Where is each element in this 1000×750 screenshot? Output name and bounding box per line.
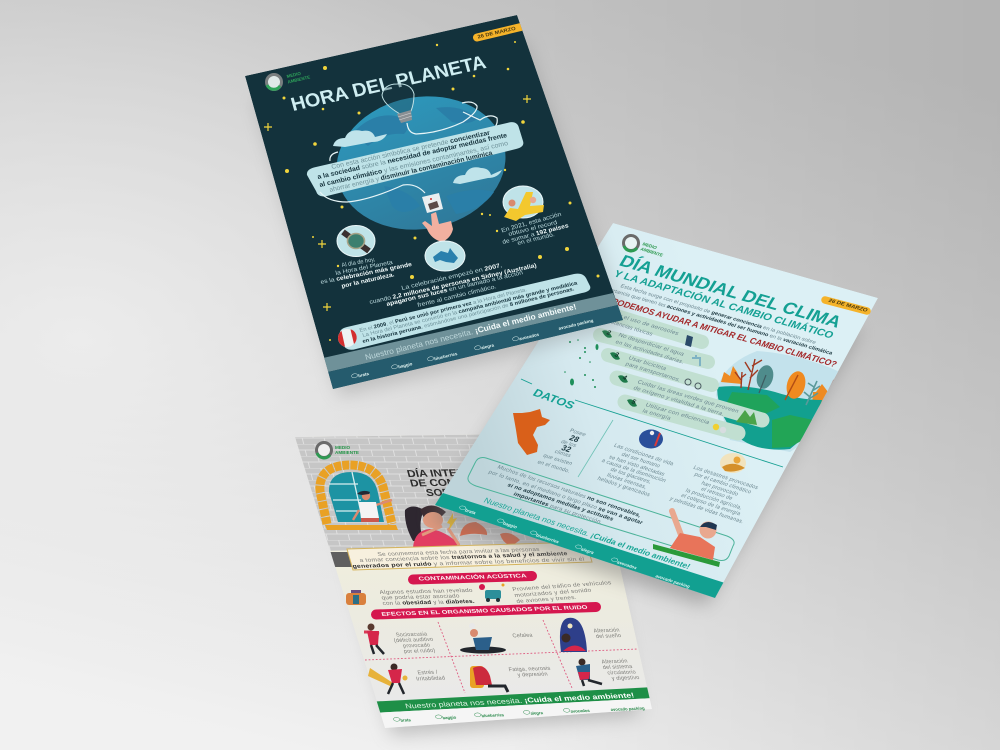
text: disasters: por el cambio climático bbox=[693, 472, 752, 495]
text: living conditions: del ser humano bbox=[620, 452, 661, 469]
stat: 28 of 32 climates: en el mundo. bbox=[536, 460, 571, 475]
text: traffic noise source: de aviones y trenes. bbox=[516, 595, 578, 605]
poster 3: noise day bbox=[295, 433, 655, 735]
date tag bbox=[477, 26, 525, 38]
text: disasters: han provocado bbox=[700, 481, 739, 498]
heading: contaminación acústica: CONTAMINACIÓN ACÚSTICA bbox=[417, 571, 528, 582]
sponsor logos: poster 2: ⬭avocados bbox=[609, 555, 640, 571]
effect: socioacusia bbox=[364, 624, 436, 655]
tip 5: energy: 5 bbox=[630, 399, 637, 406]
sponsor logos: poster 3: ⬭baggio bbox=[434, 712, 458, 721]
text: living conditions bbox=[596, 443, 675, 498]
tip 5: energy bbox=[627, 399, 726, 433]
illustration: window with woman bbox=[320, 465, 398, 530]
illustration: woman covering ears bbox=[405, 505, 520, 548]
sponsor logos: poster 3: ⬭avocados bbox=[562, 705, 591, 715]
map: Peru bbox=[513, 409, 550, 455]
sponsor logos: poster 1: ⬭baggio bbox=[390, 358, 414, 372]
tip 2: water: No desperdiciar el agua bbox=[617, 333, 686, 358]
effect: alteración circulatoria: y digestivo bbox=[611, 675, 640, 682]
effect: alteración del sueño: del sueño bbox=[595, 633, 622, 640]
illustration: globe bbox=[326, 83, 516, 243]
text: living conditions: a causa de la disminución bbox=[600, 458, 667, 484]
text: largest celebration: es la celebración más grande bbox=[320, 262, 413, 286]
stars bbox=[264, 41, 600, 341]
stat: 28 of 32 climates: climas bbox=[553, 449, 572, 459]
panel: noise day introduction bbox=[347, 542, 592, 570]
tip 5: energy: Utilizar con eficiencia bbox=[644, 403, 711, 426]
panel: main message: al cambio climático y las emisiones contaminantes, así como bbox=[319, 140, 509, 189]
text: 2007 origin: apagaron sus luces en un llamado a la acción bbox=[386, 270, 524, 308]
effect: estrés / irritabilidad: Irritabilidad bbox=[415, 676, 446, 682]
text: disasters: el colapso de la energía bbox=[680, 493, 742, 517]
effect: cefalea: Cefalea bbox=[512, 633, 534, 639]
effect: estrés / irritabilidad: Estrés / bbox=[417, 670, 439, 676]
effect: alteración circulatoria: Alteración bbox=[601, 659, 629, 665]
illustration: watch circle bbox=[337, 226, 375, 256]
illustration: australia circle bbox=[425, 241, 465, 271]
heading: datos with rule bbox=[521, 379, 783, 467]
stat: 28 of 32 climates: 32 bbox=[560, 444, 573, 454]
footer slogan: poster 2: Nuestro planeta nos necesita. ¡Cuida el medio ambiente! bbox=[482, 496, 692, 571]
text: 2021 record bbox=[501, 212, 570, 247]
footer band bbox=[430, 493, 725, 600]
effect: fatiga, neurosis y depresión bbox=[470, 666, 551, 692]
poster 3 drop shadow bbox=[330, 450, 640, 735]
text: 2021 record: En 2021, esta acción bbox=[501, 212, 562, 234]
icon: climate conditions bbox=[639, 430, 663, 448]
tip 2: water: 2 bbox=[605, 330, 612, 337]
poster 1: earth hour bbox=[245, 15, 630, 396]
panel: Peru participation: En el 2009, el Perú se unió por primera vez a la Hora del Planeta. bbox=[359, 287, 528, 334]
stat: 28 of 32 climates: Posee bbox=[568, 428, 587, 438]
text: living conditions: Las condiciones de vida bbox=[612, 443, 675, 468]
text: largest celebration: la Hora del Planeta bbox=[335, 260, 394, 277]
illustration: light bulb with wire bbox=[382, 84, 497, 134]
sponsor logos: poster 2: ⬭baggio bbox=[495, 516, 520, 530]
text: obesity and diabetes: que podría estar asociado bbox=[381, 594, 461, 601]
heading: how can we help: ¿CÓMO PODEMOS AYUDAR A MITIGAR EL CAMBIO CLIMÁTICO? bbox=[577, 286, 839, 369]
text: disasters bbox=[668, 465, 759, 525]
effect: alteración del sueño: Alteración bbox=[593, 628, 621, 634]
illustration: switch and hand bbox=[422, 193, 453, 242]
text: 2021 record: de sumar a 192 países bbox=[502, 223, 570, 246]
tip 4: green areas: de oxígeno y vitalidad a la tierra. bbox=[632, 386, 726, 418]
tip 3: bicycle: Usar bicicleta bbox=[627, 356, 668, 372]
stat: 28 of 32 climates: de los bbox=[559, 439, 578, 449]
text: obesity and diabetes bbox=[379, 588, 476, 607]
panel: noise day introduction: a tomar conciencia sobre los trastornos a la salud y el ambiente bbox=[359, 551, 568, 564]
logo: medio ambiente: MEDIO bbox=[335, 445, 350, 450]
effect: alteración circulatoria bbox=[576, 658, 640, 686]
text: traffic noise source: Proviene del tráfico de vehículos bbox=[512, 580, 612, 593]
date tag: 26 DE MARZO bbox=[827, 298, 869, 314]
tip 4: green areas: 4 bbox=[621, 375, 628, 382]
text: traffic noise source: motorizados y del sonido bbox=[514, 588, 592, 599]
sponsor logos: poster 3: ⬭alegra bbox=[522, 707, 544, 717]
text: 2007 origin: La celebración empezó en 2007, bbox=[401, 263, 503, 292]
tip 3: bicycle bbox=[610, 352, 701, 389]
logo: medio ambiente bbox=[316, 442, 359, 458]
text: largest celebration bbox=[320, 257, 413, 290]
tip 3: bicycle: 3 bbox=[613, 352, 620, 359]
heading: effects on the body: EFECTOS EN EL ORGANISMO CAUSADOS POR EL RUIDO bbox=[381, 605, 589, 618]
poster 3 sheet bbox=[295, 433, 655, 730]
panel: Peru participation: en la historia peruana , estimándose una participación de 8 millones de personas. bbox=[362, 286, 576, 345]
falling green leaves bbox=[564, 339, 598, 388]
sponsor logos: poster 1: avocado packing bbox=[558, 318, 594, 331]
effect: alteración del sueño bbox=[560, 618, 622, 652]
effect: fatiga, neurosis y depresión: y depresión bbox=[517, 672, 549, 678]
effect: fatiga, neurosis y depresión: Fatiga, neurosis bbox=[508, 666, 551, 673]
stat: 28 of 32 climates: que existen bbox=[542, 453, 573, 467]
sponsor logos: poster 2: ⬭brata bbox=[457, 503, 479, 516]
illustration: man raising hand bbox=[653, 511, 720, 567]
sponsor logos: poster 1: ⬭avocados bbox=[511, 329, 540, 344]
text: 2007 origin: frente al cambio climático. bbox=[417, 284, 498, 309]
text: climate day introduction: Esta fecha surge con el propósito de generar conciencia en la población sobre bbox=[619, 284, 817, 346]
panel: noise day introduction: Se conmemora esta fecha para invitar a las personas bbox=[377, 547, 541, 558]
logo: medio ambiente: MEDIO bbox=[286, 71, 302, 79]
logo: medio ambiente: AMBIENTE bbox=[335, 450, 359, 455]
pills: five tips bbox=[590, 308, 762, 433]
sponsor logos: poster 1: ⬭blueberries bbox=[426, 348, 459, 364]
icon: drought sun bbox=[720, 453, 746, 473]
tip 4: green areas bbox=[618, 375, 757, 425]
sponsor logos: poster 2: avocado packing bbox=[654, 574, 691, 589]
tip 1: aerosols: Evitar el uso de aerosoles bbox=[604, 310, 680, 337]
text: living conditions: se han visto afectadas bbox=[607, 455, 666, 478]
sponsor logos: poster 2: ⬭alegra bbox=[573, 542, 597, 556]
sponsor logos: poster 3: ⬭blueberries bbox=[473, 709, 506, 719]
poster 1 sheet bbox=[245, 15, 630, 395]
text: largest celebration: por la naturaleza. bbox=[341, 272, 396, 290]
panel: Peru participation bbox=[340, 274, 590, 350]
poster 2: climate day bbox=[430, 223, 878, 606]
poster 2 sheet bbox=[430, 223, 878, 600]
poster 1 drop shadow bbox=[255, 40, 626, 396]
tip 5: energy: la energía bbox=[641, 409, 673, 422]
effect: socioacusia: (déficit auditivo bbox=[393, 637, 434, 644]
text: traffic noise source bbox=[512, 580, 612, 605]
effect: socioacusia: Socioacusia bbox=[395, 632, 429, 638]
text: 2007 origin: cuando 2,2 millones de personas en Sidney (Australia) bbox=[369, 263, 537, 306]
logo: medio ambiente bbox=[624, 236, 664, 258]
effect: alteración circulatoria: circulatorio bbox=[607, 670, 637, 676]
sponsor logos: poster 3: avocado packing bbox=[610, 706, 646, 712]
text: living conditions: lluvias intensas, bbox=[605, 473, 648, 491]
title: noise day: SOBRE EL RUIDO bbox=[425, 486, 524, 499]
footer slogan: poster 1: Nuestro planeta nos necesita. ¡Cuida el medio ambiente! bbox=[364, 302, 577, 362]
poster 1: earth hour: 26 DE MARZO bbox=[477, 26, 517, 40]
effect: socioacusia: por el ruido) bbox=[403, 648, 436, 655]
title: hora del planeta: HORA DEL PLANETA bbox=[289, 52, 489, 116]
text: obesity and diabetes: Algunos estudios han revelado bbox=[379, 588, 474, 596]
heading: contaminación acústica bbox=[413, 571, 532, 582]
tip 2: water bbox=[602, 330, 700, 366]
panel: Peru participation: La Hora del Planeta se convirtió en la campaña ambiental más grande y mediática bbox=[362, 280, 578, 339]
text: climate day introduction: la importancia que tienen las acciones y actividades del ser humano en la variación climática bbox=[594, 284, 834, 357]
callout: natural resources: si no adoptamos medidas y actitudes bbox=[506, 483, 615, 523]
sponsor logos: poster 1 bbox=[350, 318, 594, 381]
stat: 28 of 32 climates: 28 bbox=[568, 434, 581, 444]
sponsor logos: poster 1: ⬭alegra bbox=[473, 340, 495, 353]
text: disasters: y pérdidas de vidas humanas. bbox=[668, 496, 745, 525]
sponsor logos: poster 2 bbox=[457, 503, 691, 589]
tip 1: aerosols bbox=[599, 310, 693, 347]
text: disasters: el retraso de bbox=[699, 487, 734, 502]
illustration: landscape with trees and fire bbox=[716, 351, 840, 452]
sponsor logos: poster 2: ⬭blueberries bbox=[528, 528, 562, 545]
tip 3: bicycle: para transportarnos. bbox=[624, 362, 682, 383]
title: noise day: DÍA INTERNACIONAL bbox=[405, 465, 529, 480]
title: noise day: DE CONCIENCIACIÓN bbox=[408, 475, 534, 489]
text: obesity and diabetes: con la obesidad y la diabetes. bbox=[382, 599, 476, 607]
sponsor logos: poster 3: ⬭brata bbox=[392, 714, 412, 724]
tip 1: aerosols: y sustancias tóxicas bbox=[599, 317, 654, 338]
logo: medio ambiente: AMBIENTE bbox=[639, 247, 664, 258]
callout: natural resources: importantes para su protección. bbox=[512, 492, 604, 526]
panel: noise day introduction: generados por el ruido y a informar sobre los beneficios de vivir sin él bbox=[352, 557, 585, 570]
footer bands bbox=[323, 293, 618, 372]
stat: 28 of 32 climates bbox=[536, 428, 587, 475]
logo: medio ambiente: MEDIO bbox=[641, 242, 658, 250]
illustration: wire to switch bbox=[320, 152, 425, 202]
callout: natural resources: por lo tanto, en el mediano o largo plazo se van a agotar bbox=[487, 470, 645, 526]
tip 4: green areas: Cuidar las áreas verdes que proveen bbox=[636, 380, 740, 415]
illustration: clouds bbox=[333, 130, 502, 184]
panel: main message bbox=[307, 122, 523, 196]
text: living conditions: de los glaciares, bbox=[609, 467, 653, 485]
callout: natural resources: Muchos de los recursos naturales no son renovables, bbox=[496, 465, 642, 519]
heading: effects on the body bbox=[376, 605, 596, 618]
callout: natural resources bbox=[468, 458, 734, 560]
sponsor logos: poster 3 bbox=[392, 705, 646, 724]
panel: main message: ahorrar energía y disminuir la contaminación lumínica bbox=[329, 150, 494, 194]
logo: medio ambiente: AMBIENTE bbox=[287, 74, 311, 84]
title: climate day: Y LA ADAPTACIÓN AL CAMBIO CLIMÁTICO bbox=[611, 267, 837, 341]
text: disasters: la producción agrícola, bbox=[684, 488, 743, 511]
effect: cefalea bbox=[460, 623, 534, 654]
title: noise day bbox=[405, 465, 534, 499]
logo: medio ambiente bbox=[266, 71, 311, 90]
icon: scale with obesity bbox=[346, 590, 366, 605]
grid of dotted dividers bbox=[365, 620, 638, 693]
effect: socioacusia: provocado bbox=[402, 643, 431, 649]
illustration: people celebrating circle bbox=[503, 186, 544, 221]
text: 2021 record: obtuvo el record bbox=[508, 220, 558, 238]
panel: main message: a la sociedad sobre la necesidad de adoptar medidas frente bbox=[317, 132, 508, 181]
tip 2: water: en las actividades diarias. bbox=[614, 340, 685, 366]
divider bbox=[578, 420, 613, 477]
poster 2 drop shadow bbox=[430, 250, 860, 606]
icon: Peru flag bbox=[338, 329, 357, 347]
text: largest celebration: Al día de hoy, bbox=[341, 257, 376, 269]
effect: estrés / irritabilidad bbox=[368, 664, 446, 694]
text: living conditions: helados y granizados bbox=[596, 476, 651, 498]
heading: datos with rule: DATOS bbox=[530, 388, 577, 412]
text: disasters: Los desastres provocados bbox=[692, 465, 759, 491]
effect: alteración circulatoria: del sistema bbox=[602, 664, 634, 671]
text: 2021 record: en el mundo. bbox=[517, 232, 556, 247]
footer slogan: poster 3: Nuestro planeta nos necesita. ¡Cuida el medio ambiente! bbox=[404, 691, 635, 710]
panel: main message: Con esta acción simbólica se pretende concientizar bbox=[331, 130, 491, 171]
sponsor logos: poster 1: ⬭brata bbox=[350, 368, 370, 381]
icon: car traffic noise bbox=[479, 584, 504, 602]
title: climate day: DÍA MUNDIAL DEL CLIMA bbox=[616, 251, 846, 331]
